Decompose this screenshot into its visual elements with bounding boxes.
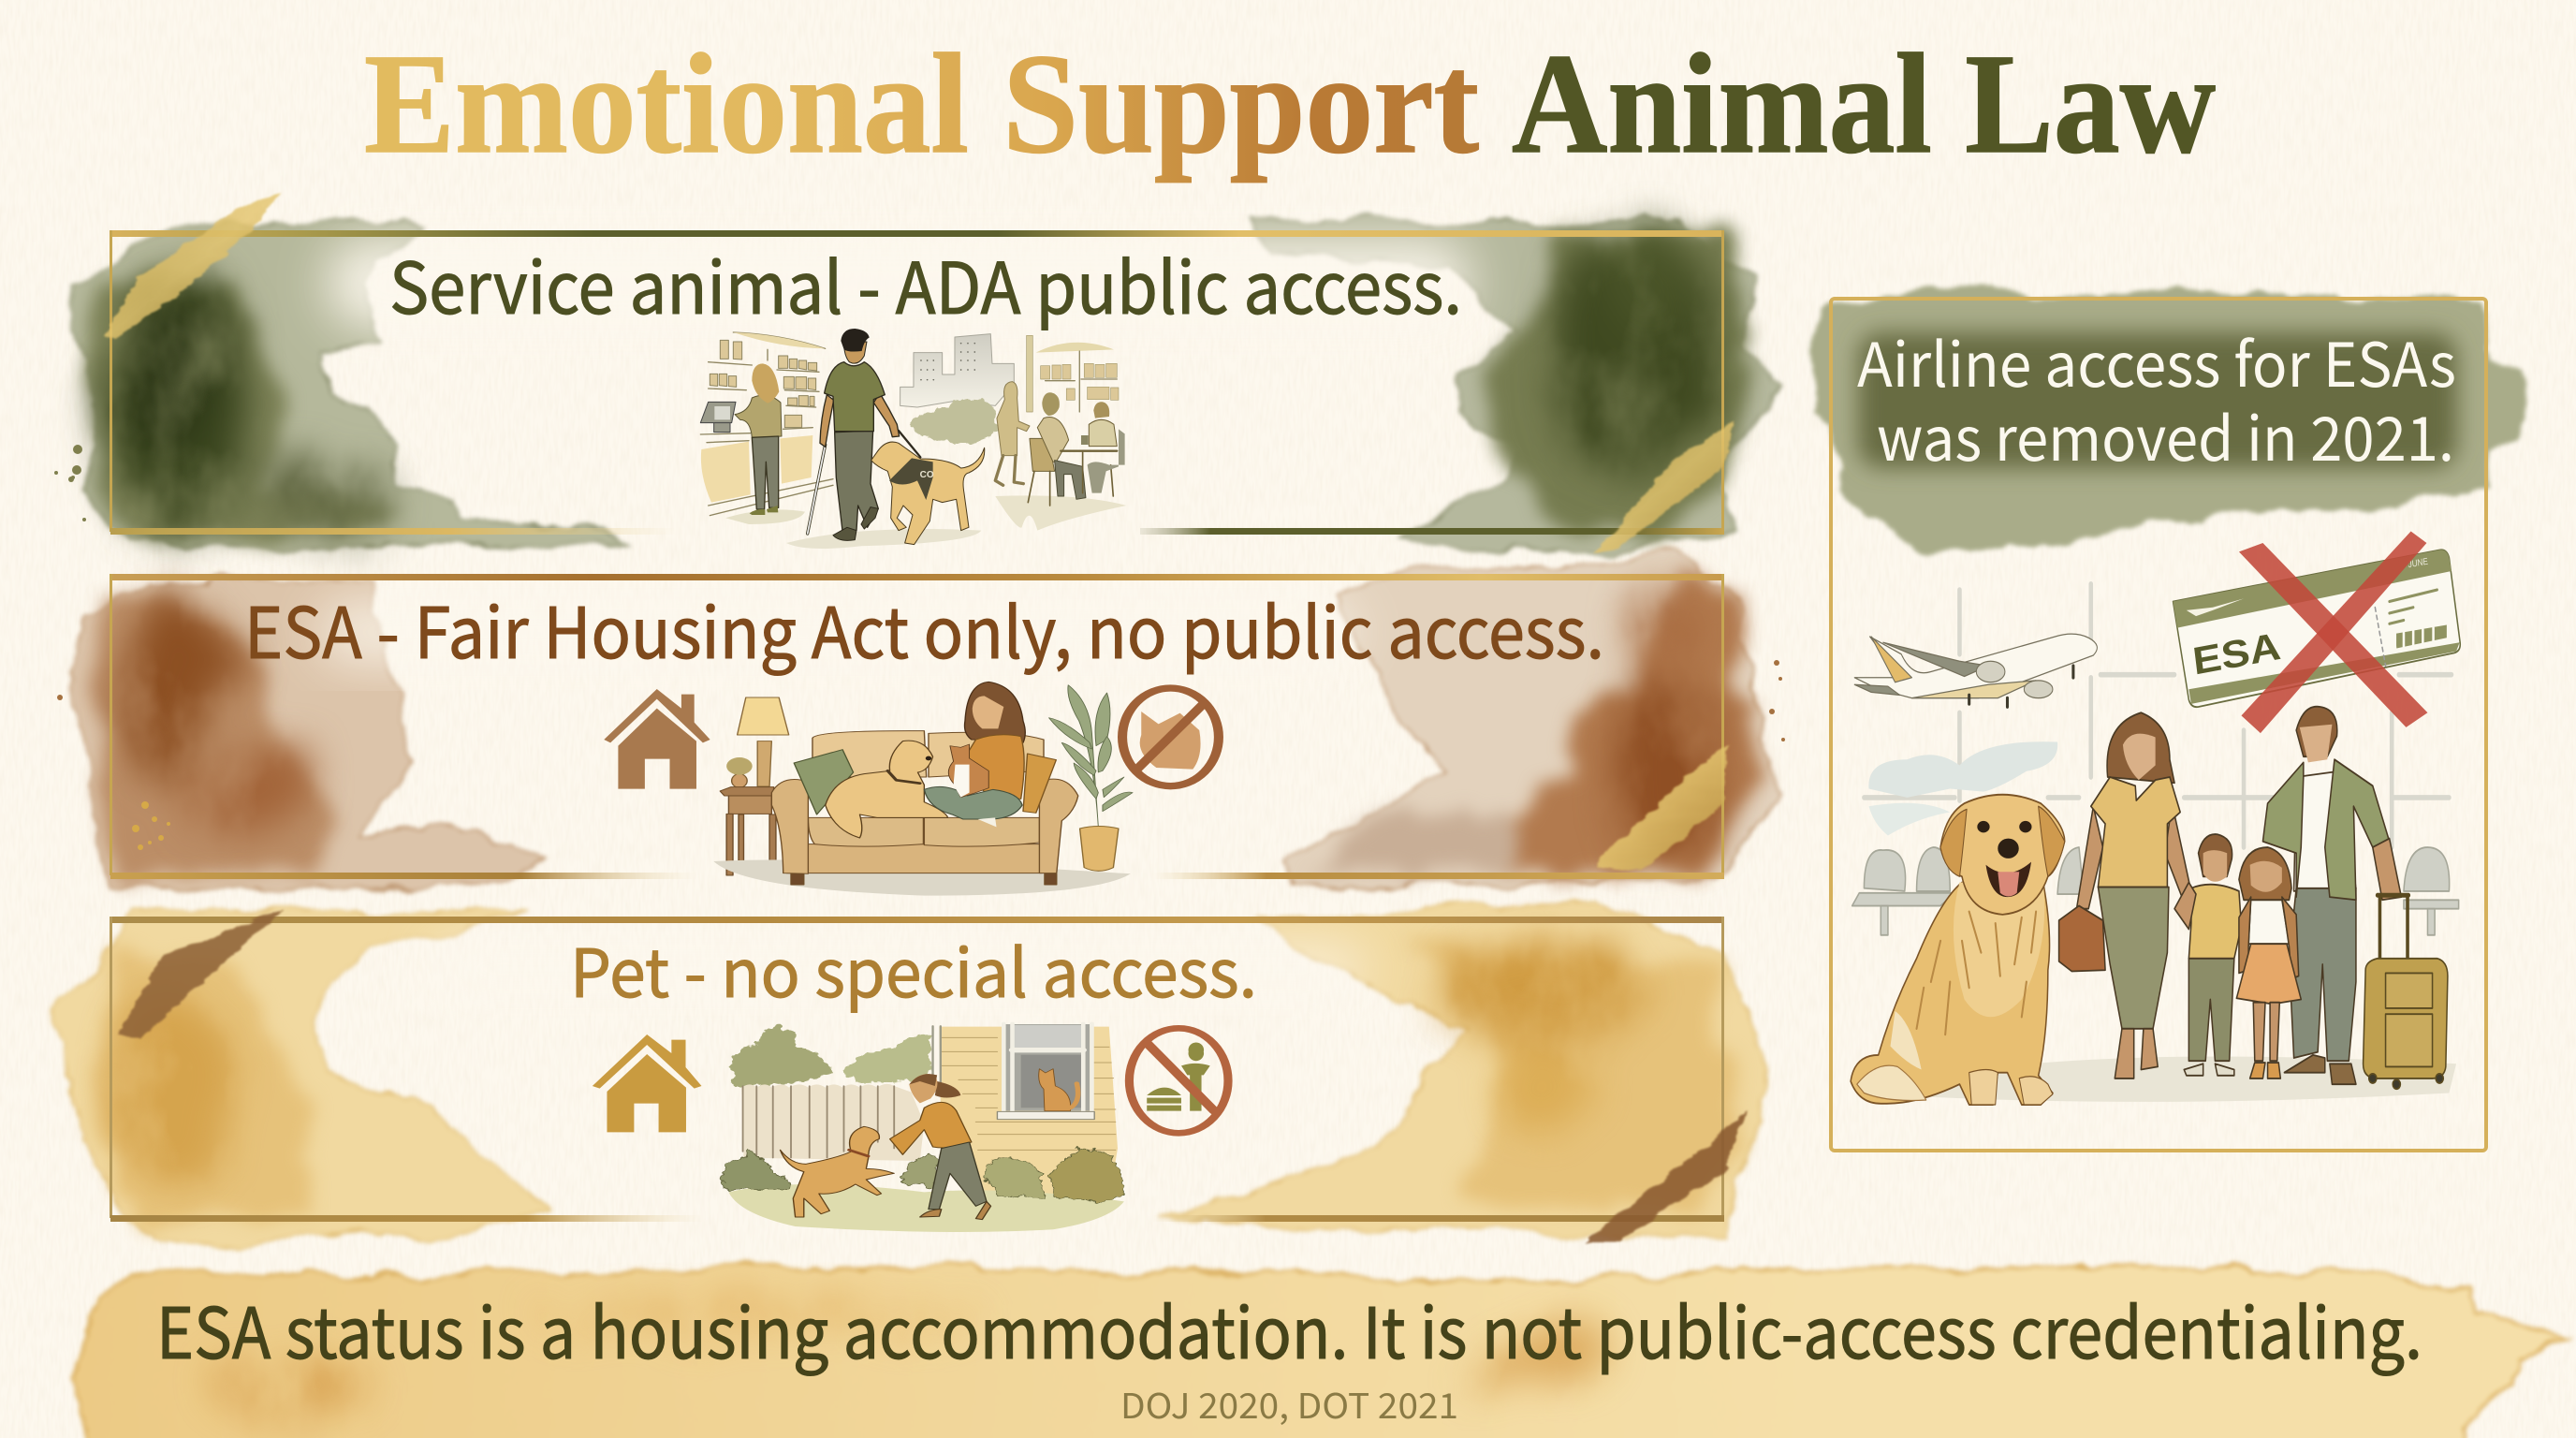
golden retriever <box>1851 795 2065 1105</box>
panel: ESA <box>57 552 1785 896</box>
illustration: pet at home in yard <box>593 1023 1228 1232</box>
man <box>2262 707 2401 1084</box>
girl <box>2236 847 2301 1078</box>
icon: no people food sign <box>1129 1028 1228 1133</box>
waiting seats <box>1852 847 2459 935</box>
icon: house <box>604 689 710 789</box>
icon: house <box>593 1034 701 1132</box>
frame <box>110 917 1724 1222</box>
airline banner wash <box>1811 286 2524 549</box>
window and cat <box>997 1023 1094 1120</box>
icon: no cat sign <box>1122 688 1219 786</box>
register <box>700 402 736 433</box>
house wall <box>939 1027 1118 1198</box>
panel background halo behind heading <box>318 599 1357 665</box>
ground <box>728 1184 1124 1232</box>
floor shadow <box>1859 1057 2456 1102</box>
illustration: guide dog in public places <box>700 329 1126 549</box>
guide dog <box>899 431 920 457</box>
plant <box>1049 685 1133 827</box>
ESA boarding pass with red cross: ESA <box>2190 624 2283 682</box>
watercolor band <box>74 1264 2570 1438</box>
sofa <box>771 731 1078 885</box>
cat <box>948 744 988 798</box>
woman <box>2059 712 2193 1078</box>
boy <box>2174 834 2241 1076</box>
frame <box>110 574 1724 879</box>
ESA boarding pass with red cross: JUNE <box>2408 556 2428 569</box>
heading: Service animal - ADA public access. <box>389 231 1462 334</box>
heading: Pet - no special access. <box>570 921 1257 1017</box>
trees <box>731 1026 930 1086</box>
bottom banner <box>74 1264 2570 1438</box>
suitcase <box>2364 895 2448 1089</box>
panel background halo behind heading <box>328 239 1470 328</box>
panel background halo behind heading <box>431 941 1367 997</box>
heading <box>1857 316 2456 478</box>
side table <box>720 787 776 875</box>
frame <box>110 230 1724 535</box>
fence <box>741 1084 924 1161</box>
pedestrian <box>997 382 1030 456</box>
illustration: guide dog in public places: CO <box>920 470 934 480</box>
gold brush strokes <box>105 192 1734 552</box>
dog on sofa <box>826 741 948 838</box>
illustration: ESA at home on sofa <box>604 682 1219 896</box>
cafe seated people <box>1030 438 1055 471</box>
title: Animal Law <box>1512 25 2216 183</box>
takeaway text: ESA status is a housing accommodation. It is not public-access credentialing. <box>156 1277 2422 1379</box>
ink droplets <box>54 445 86 521</box>
panel: service animal <box>54 192 1776 552</box>
shop customer <box>735 395 782 437</box>
shrubs <box>724 1147 1124 1201</box>
brown brush strokes <box>116 908 1747 1241</box>
illustration: airport family scene <box>1851 532 2460 1105</box>
woman <box>935 1081 960 1097</box>
airport window <box>1864 584 2452 847</box>
title: Emotional Support <box>364 25 1479 183</box>
title <box>364 25 2216 183</box>
buildings <box>900 334 1014 407</box>
plane <box>1854 634 2097 707</box>
gold brush stroke <box>1595 743 1727 871</box>
heading: ESA - Fair Housing Act only, no public access. <box>244 577 1604 679</box>
ESA boarding pass with red cross <box>2174 532 2460 733</box>
heading: was removed in 2021. <box>1877 390 2454 478</box>
panel: airline access <box>1811 286 2524 1151</box>
pillows <box>794 750 854 814</box>
bushes <box>910 399 996 444</box>
heading: Airline access for ESAs <box>1857 316 2456 404</box>
source citation: DOJ 2020, DOT 2021 <box>1120 1378 1458 1429</box>
lamp <box>738 697 789 786</box>
woman <box>965 682 1025 742</box>
frame <box>1831 299 2486 1151</box>
man with cane <box>808 445 826 534</box>
gold speckles <box>132 801 170 850</box>
dog jumping <box>781 1126 894 1217</box>
panel: pet <box>58 902 1770 1246</box>
